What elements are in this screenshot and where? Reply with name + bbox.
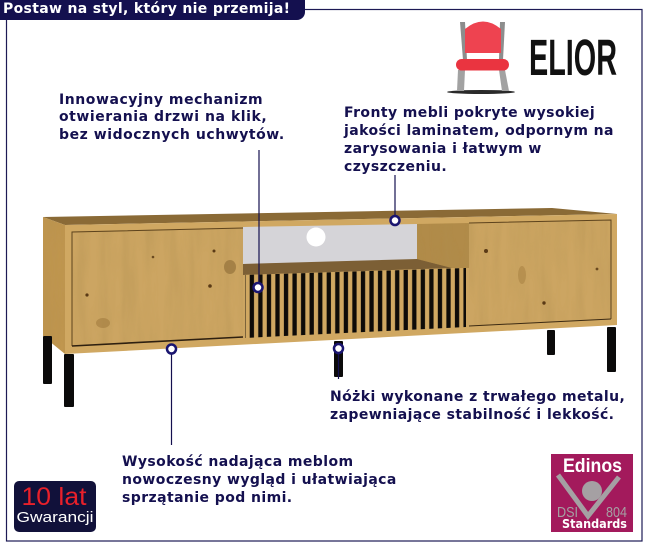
title banner: Postaw na styl, który nie przemija! [3,1,290,17]
text: laminate fronts: czyszczeniu. [344,159,447,175]
leader line: laminate [394,175,396,220]
badge: Edinos DSI 804 Standards: DSI [557,504,578,521]
text: height: nowoczesny wygląd i ułatwiająca [122,472,397,488]
niche shelf [243,259,452,275]
text: click mechanism [59,92,285,143]
left door [72,228,243,346]
cabinet legs [43,327,616,407]
open niche with cable hole [243,224,417,264]
leader line: height [170,349,172,445]
text: laminate fronts: Fronty mebli pokryte wysokiej [344,105,595,121]
leader line: legs [338,348,340,379]
cabinet left side panel [43,217,65,354]
badge: Edinos DSI 804 Standards: Edinos [563,456,622,477]
marker: click mechanism [254,283,262,292]
text: laminate fronts [344,105,614,175]
badge: Edinos DSI 804 Standards [551,454,633,532]
text: height: sprzątanie pod nimi. [122,490,293,506]
marker: laminate [390,216,400,225]
niche right panel [417,223,469,268]
badge: 10-year warranty [14,481,96,532]
marker: height [167,344,176,354]
badge: Edinos DSI 804 Standards: Standards [562,516,627,531]
cabinet front frame [65,214,617,354]
badge: Edinos DSI 804 Standards: 804 [606,504,627,521]
logo: Elior [447,22,617,94]
text: height: Wysokość nadająca meblom [122,454,354,470]
right door [469,220,611,326]
icon: red chair [447,22,515,94]
text: laminate fronts: zarysowania i łatwym w [344,141,542,157]
cabinet top surface [43,208,617,225]
badge: 10-year warranty: Gwarancji [16,509,94,526]
leader line: click mechanism [258,150,260,287]
text: click mechanism: Innowacyjny mechanizm [59,92,263,108]
text: click mechanism: otwierania drzwi na klik, [59,109,267,125]
badge: 10-year warranty: 10 lat [22,483,87,511]
text: metal legs [330,389,625,423]
marker: legs [334,344,343,353]
text: laminate fronts: jakości laminatem, odpornym na [344,123,614,139]
text: metal legs: Nóżki wykonane z trwałego metalu, [330,389,625,405]
text: metal legs: zapewniające stabilność i lekkość. [330,407,614,423]
slatted drawer front [243,265,469,341]
text: click mechanism: bez widocznych uchwytów. [59,127,285,143]
furniture: TV cabinet [43,208,617,407]
text: height [122,454,397,506]
